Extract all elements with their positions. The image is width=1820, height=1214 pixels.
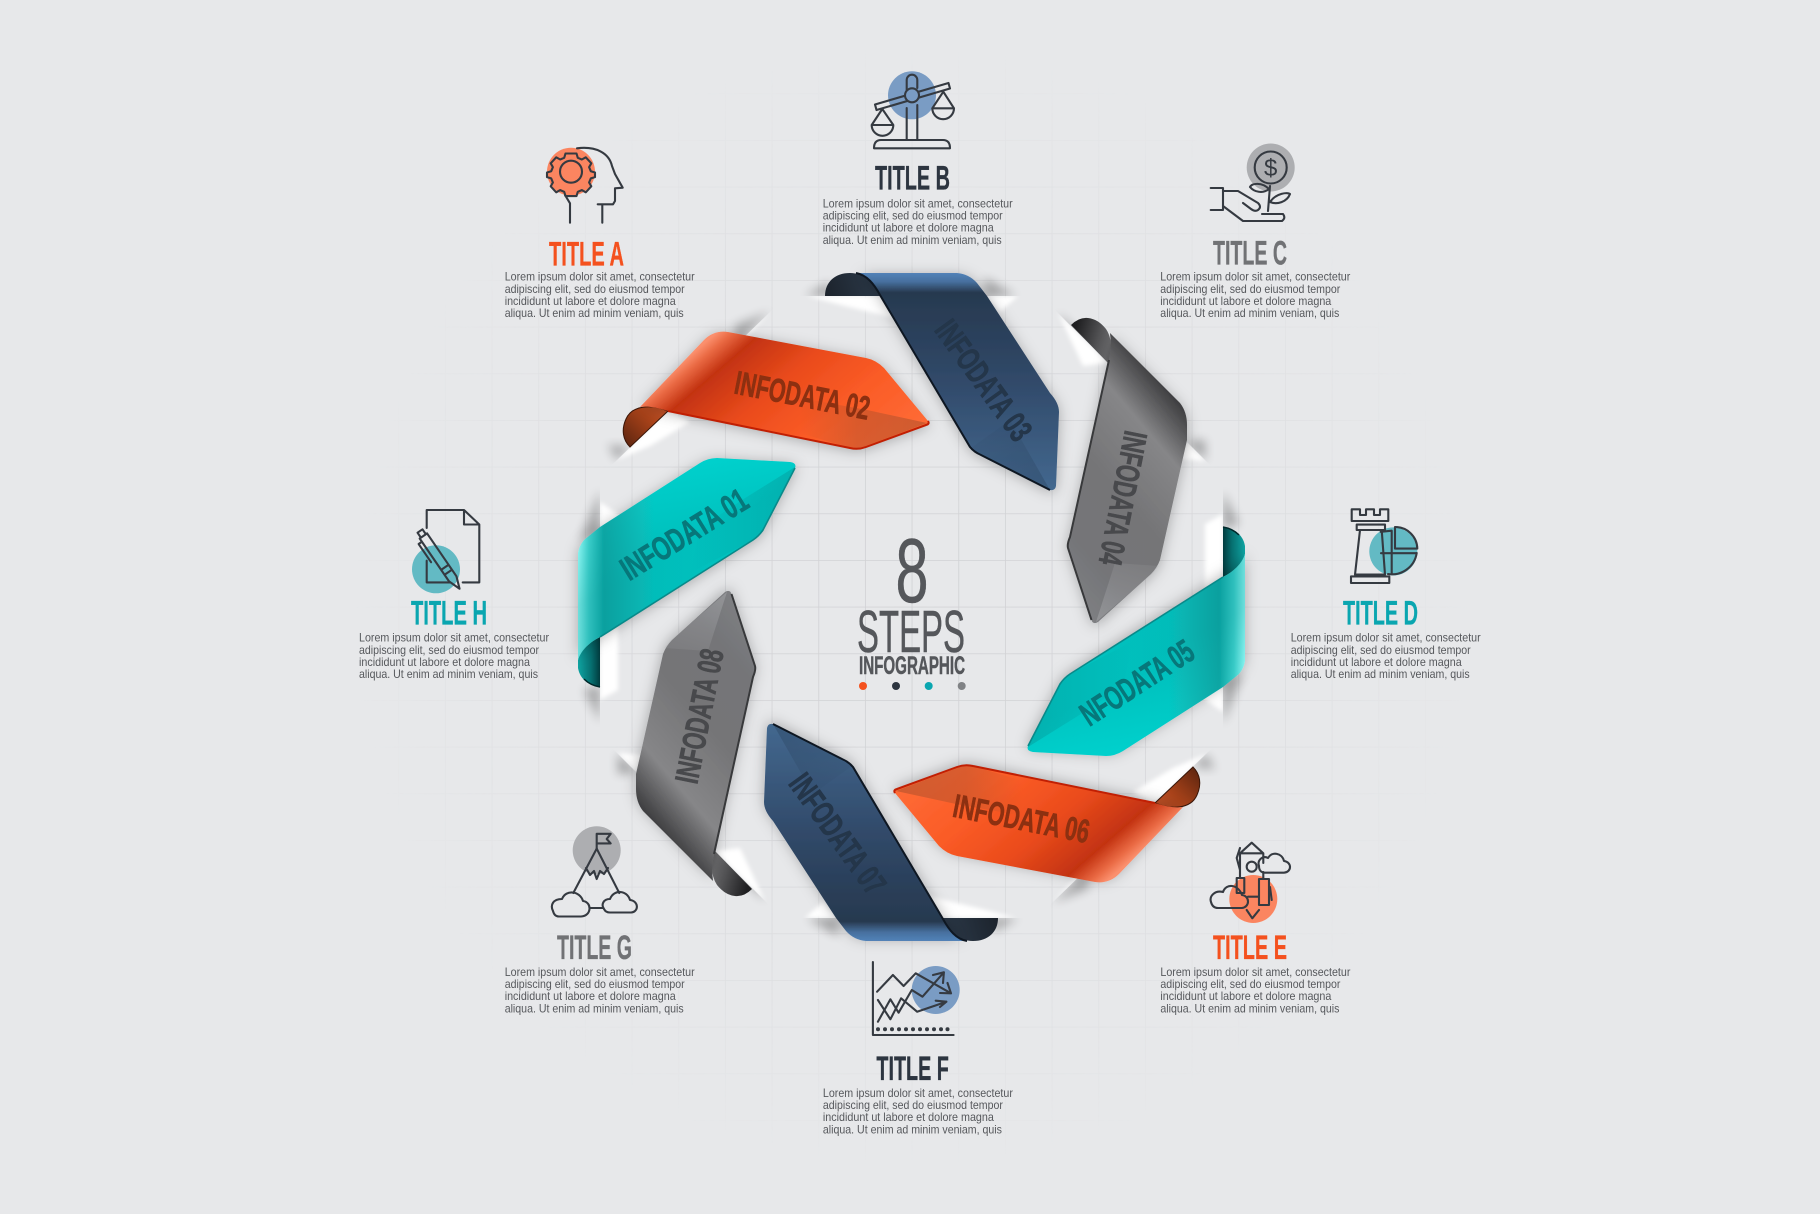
text F: incididunt ut labore et dolore magna (823, 1110, 994, 1124)
step H (359, 510, 549, 681)
ribbon label 08: INFODATA 08 (668, 646, 731, 786)
text C: Lorem ipsum dolor sit amet, consectetur (1160, 270, 1350, 284)
step F (823, 962, 1013, 1136)
ribbon 03 (805, 273, 1059, 490)
text F: adipiscing elit, sed do eiusmod tempor (823, 1098, 1003, 1112)
text A: incididunt ut labore et dolore magna (505, 294, 676, 308)
title F: TITLE F (876, 1050, 949, 1088)
ribbon label 07: INFODATA 07 (782, 766, 894, 901)
step A (505, 148, 695, 320)
text B: Lorem ipsum dolor sit amet, consectetur (823, 196, 1013, 210)
title A: TITLE A (549, 236, 624, 274)
title G: TITLE G (557, 929, 632, 967)
text E: aliqua. Ut enim ad minim veniam, quis (1160, 1001, 1339, 1015)
text E: incididunt ut labore et dolore magna (1160, 989, 1332, 1003)
text D: incididunt ut labore et dolore magna (1291, 655, 1462, 669)
text D: aliqua. Ut enim ad minim veniam, quis (1291, 667, 1470, 681)
icon: head with gear (547, 148, 623, 223)
text G: adipiscing elit, sed do eiusmod tempor (505, 977, 685, 991)
icon: mountain with flag and clouds (552, 826, 637, 916)
title H: TITLE H (411, 594, 487, 632)
text G: Lorem ipsum dolor sit amet, consectetur (505, 965, 695, 979)
center title: 8 (896, 521, 928, 622)
ribbon 01 (578, 458, 795, 722)
ribbon 06 (894, 754, 1215, 902)
text E: adipiscing elit, sed do eiusmod tempor (1160, 977, 1340, 991)
text G: incididunt ut labore et dolore magna (505, 989, 676, 1003)
ribbon label 03: INFODATA 03 (928, 313, 1040, 448)
ribbon 04 (1058, 313, 1205, 623)
text A: aliqua. Ut enim ad minim veniam, quis (505, 306, 684, 320)
title E: TITLE E (1213, 929, 1287, 967)
text B: aliqua. Ut enim ad minim veniam, quis (823, 233, 1002, 247)
step G (505, 826, 695, 1015)
text H: adipiscing elit, sed do eiusmod tempor (359, 643, 539, 657)
ribbon 07 (764, 724, 1018, 941)
ribbon label 06: INFODATA 06 (950, 787, 1093, 850)
step E (1160, 843, 1350, 1015)
title D: TITLE D (1343, 594, 1418, 632)
icon: line chart with arrows (873, 962, 960, 1035)
text B: adipiscing elit, sed do eiusmod tempor (823, 209, 1003, 223)
text E: Lorem ipsum dolor sit amet, consectetur (1160, 965, 1350, 979)
text G: aliqua. Ut enim ad minim veniam, quis (505, 1001, 684, 1015)
ribbon label 04: INFODATA 04 (1092, 428, 1155, 569)
text C: incididunt ut labore et dolore magna (1160, 294, 1332, 308)
icon: rook and pie chart (1351, 509, 1417, 583)
center title (857, 521, 966, 690)
text A: adipiscing elit, sed do eiusmod tempor (505, 282, 685, 296)
icon: rocket and clouds (1211, 843, 1290, 923)
ribbon 02 (608, 312, 929, 460)
icon: document and pen (412, 510, 479, 594)
text B: incididunt ut labore et dolore magna (823, 221, 994, 235)
text D: adipiscing elit, sed do eiusmod tempor (1291, 643, 1471, 657)
text A: Lorem ipsum dolor sit amet, consectetur (505, 270, 695, 284)
text H: Lorem ipsum dolor sit amet, consectetur (359, 631, 549, 645)
text C: adipiscing elit, sed do eiusmod tempor (1160, 282, 1340, 296)
title B: TITLE B (875, 160, 950, 198)
ribbon label 05: NFODATA 05 (1073, 632, 1201, 733)
title C: TITLE C (1213, 234, 1287, 272)
ribbon 08 (618, 591, 765, 901)
text C: aliqua. Ut enim ad minim veniam, quis (1160, 306, 1339, 320)
step D (1291, 509, 1481, 681)
icon: hand with coin plant (1211, 144, 1295, 221)
step C (1160, 144, 1350, 320)
center title: INFOGRAPHIC (859, 652, 965, 680)
text D: Lorem ipsum dolor sit amet, consectetur (1291, 631, 1481, 645)
text F: Lorem ipsum dolor sit amet, consectetur (823, 1086, 1013, 1100)
ribbon 05 (1028, 492, 1245, 756)
step B (823, 71, 1013, 247)
ribbon label 02: INFODATA 02 (732, 364, 873, 427)
text H: aliqua. Ut enim ad minim veniam, quis (359, 667, 538, 681)
ribbon label 01: INFODATA 01 (614, 481, 755, 587)
text F: aliqua. Ut enim ad minim veniam, quis (823, 1122, 1002, 1136)
text H: incididunt ut labore et dolore magna (359, 655, 530, 669)
icon: hand with coin plant: $ (1264, 155, 1277, 182)
icon: scales (872, 71, 954, 148)
center title: STEPS (857, 599, 965, 665)
